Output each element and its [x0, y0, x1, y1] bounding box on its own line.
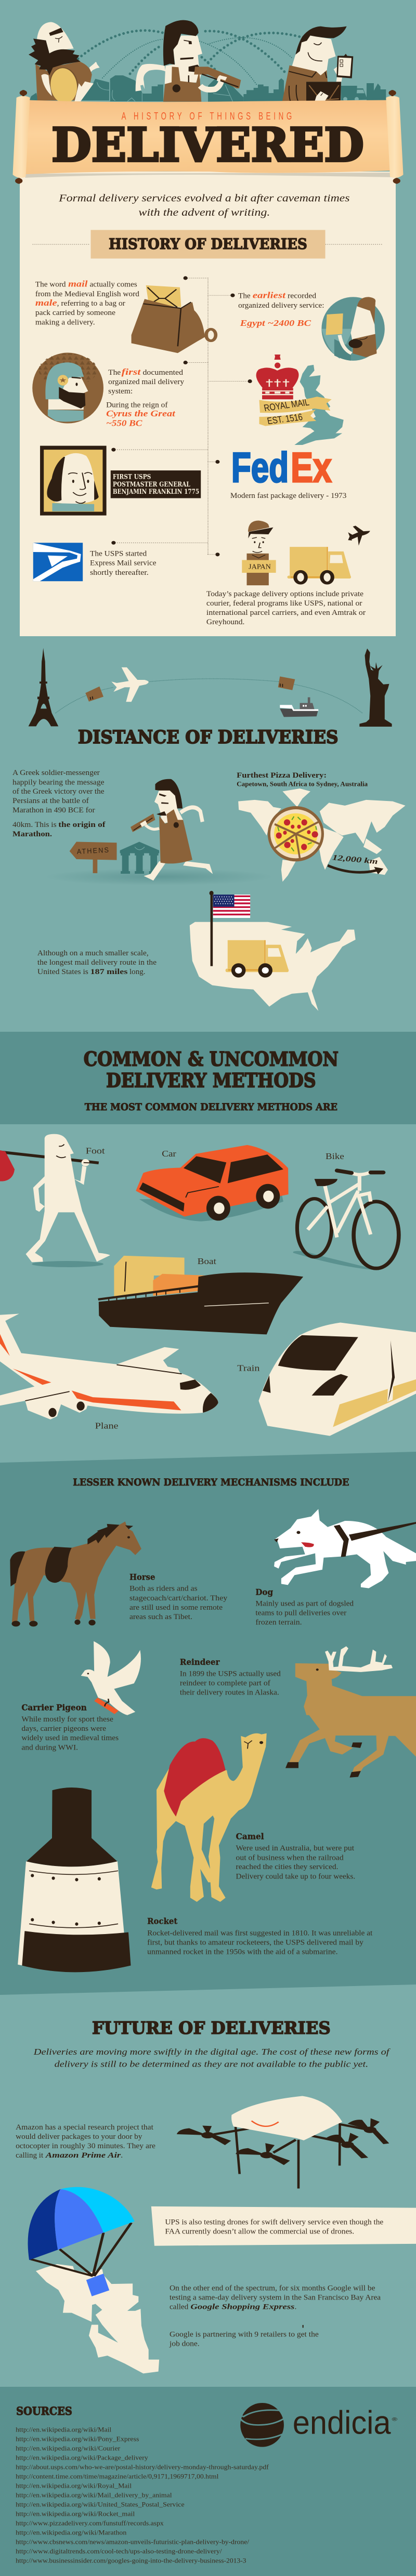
- text: marathon: A Greek soldier-messenger: [12, 769, 100, 777]
- text: dog: frozen terrain.: [255, 1619, 302, 1626]
- intro text: with the advent of writing.: [138, 207, 270, 218]
- list of source urls: http://en.wikipedia.org/wiki/Marathon: [16, 2529, 126, 2536]
- list of source urls: http://en.wikipedia.org/wiki/Mail: [16, 2426, 112, 2434]
- future of deliveries content: [16, 2096, 416, 2373]
- text: first mail system: [106, 367, 185, 428]
- list of source urls: http://en.wikipedia.org/wiki/United_States_Postal_Service: [16, 2501, 185, 2508]
- text: furthest pizza delivery: [237, 771, 368, 788]
- ground shadow: [45, 869, 274, 885]
- text: marathon: [12, 769, 106, 838]
- heading: common and uncommon delivery methods: [84, 1047, 339, 1092]
- panel: common delivery methods heading band: [0, 1032, 416, 1124]
- icon: greek temple: [120, 842, 159, 874]
- text: camel: out of business when the railroad: [236, 1853, 344, 1862]
- heading: history of deliveries: HISTORY OF DELIVERIES: [109, 235, 307, 253]
- panel: history of deliveries paper: [20, 172, 396, 636]
- text: word mail origin: actually comes: [89, 280, 137, 288]
- mechanism: reindeer: [285, 1646, 416, 1778]
- text: reindeer: In 1899 the USPS actually used: [180, 1670, 281, 1678]
- label plate: first postmaster general: BENJAMIN FRANKLIN 1775: [113, 488, 199, 496]
- panel: lesser known mechanisms band: [0, 1452, 416, 1995]
- text: furthest pizza delivery: Furthest Pizza Delivery:: [237, 771, 327, 780]
- text: reindeer: their delivery routes in Alaska.: [180, 1689, 279, 1697]
- text: amazon prime air: calling it: [16, 2151, 43, 2159]
- icon: athens sign: ATHENS: [76, 846, 109, 856]
- timeline connectors: [111, 276, 252, 556]
- logo: usps eagle: [33, 543, 83, 581]
- list of source urls: http://en.wikipedia.org/wiki/Royal_Mail: [16, 2482, 132, 2490]
- callout: ups drones: FAA currently doesn’t allow the commercial use of drones.: [165, 2227, 354, 2236]
- text: google shopping express: [169, 2284, 381, 2348]
- illustration: amazon octocopter: [177, 2096, 389, 2188]
- text: marathon: Marathon in 490 BCE for: [12, 806, 95, 814]
- text: longest mail route: long.: [129, 968, 146, 976]
- heading: common and uncommon delivery methods: COMMON & UNCOMMON: [84, 1047, 339, 1071]
- illustration: courier with japan parcel: [241, 521, 278, 585]
- method: car: [136, 1145, 289, 1221]
- history of deliveries section: [32, 192, 385, 626]
- text: reindeer: [180, 1658, 281, 1697]
- text: camel: [236, 1832, 355, 1881]
- method: car: Car: [162, 1149, 176, 1159]
- text: camel: reached the cities they serviced.: [236, 1862, 339, 1871]
- text: marathon: happily bearing the message: [12, 778, 105, 786]
- text: today's delivery options: courier, federal programs like USPS, national or: [206, 599, 362, 608]
- list of source urls: http://en.wikipedia.org/wiki/Mail_delivery_by_animal: [16, 2491, 172, 2499]
- text: today's delivery options: Today’s package delivery options include private: [206, 589, 363, 598]
- text: first mail system: During the reign of: [106, 401, 168, 409]
- heading: lesser known mechanisms: LESSER KNOWN DELIVERY MECHANISMS INCLUDE: [73, 1477, 349, 1488]
- text: word mail origin: from the Medieval English word: [35, 290, 139, 298]
- text: reindeer: reindeer to complete part of: [180, 1679, 271, 1687]
- messenger with scroll: [136, 20, 222, 102]
- list of source urls: http://www.businessinsider.com/googles-going-into-the-delivery-business-2013-3: [16, 2557, 246, 2565]
- text: word mail origin: The word: [35, 280, 66, 288]
- icon: statue of liberty: [359, 649, 392, 727]
- text: horse: Horse: [129, 1572, 155, 1582]
- text: carrier pigeon: Carrier Pigeon: [21, 1703, 87, 1713]
- text: google shopping express: Google is partnering with 9 retailers to get the: [170, 2330, 319, 2338]
- list of source urls: http://en.wikipedia.org/wiki/Pony_Express: [16, 2435, 139, 2443]
- heading: distance of deliveries: DISTANCE OF DELIVERIES: [78, 727, 339, 747]
- text: first mail system: documented: [142, 368, 184, 376]
- logo: fedex: Ex: [291, 443, 332, 491]
- text: carrier pigeon: days, carrier pigeons were: [21, 1725, 106, 1733]
- text: earliest delivery service: [238, 291, 324, 328]
- text: amazon prime air: Amazon has a special research project that: [16, 2123, 153, 2131]
- logo: fedex: Fed: [231, 443, 289, 491]
- text: carrier pigeon: [21, 1703, 119, 1752]
- scroll: [194, 67, 241, 88]
- heading: future of deliveries: FUTURE OF DELIVERIES: [92, 2018, 331, 2038]
- text: marathon: 40km. This is: [12, 821, 57, 829]
- method: plane: [0, 1313, 218, 1430]
- method: train: Train: [237, 1363, 260, 1373]
- text: google shopping express: job done.: [169, 2340, 200, 2348]
- rocket, camel and future section: [18, 1733, 391, 2069]
- illustration: royal mail crown and uk map: EST. 1516: [266, 412, 304, 426]
- intro: future: delivery is still to be determined as they are not available to the public yet.: [55, 2060, 368, 2069]
- text: earliest delivery service: The: [238, 291, 251, 300]
- logo: endicia: ®: [392, 2416, 397, 2422]
- text: carrier pigeon: While mostly for sport these: [21, 1715, 113, 1724]
- text: carrier pigeon: and during WWI.: [21, 1744, 78, 1752]
- text: furthest pizza delivery: Capetown, South Africa to Sydney, Australia: [237, 781, 368, 788]
- list of source urls: http://www.pizzadelivery.com/funstuff/records.aspx: [16, 2519, 164, 2527]
- illustration: royal mail crown and uk map: [256, 354, 344, 445]
- text: marathon: of the Greek victory over the: [12, 787, 105, 796]
- roller finials: [15, 90, 400, 183]
- text: amazon prime air: octocopter in roughly 30 minutes. They are: [16, 2141, 155, 2150]
- lesser known delivery mechanisms: [10, 1477, 416, 1778]
- kicker: a history of things being: A HISTORY OF THINGS BEING: [122, 110, 292, 122]
- illustration: parachute package: [28, 2187, 135, 2296]
- chart: world map with pizza: [238, 788, 406, 882]
- label plate: first postmaster general: POSTMASTER GENERAL: [113, 481, 190, 488]
- title banner scroll: [12, 90, 404, 183]
- text: usps express: The USPS started: [90, 549, 147, 558]
- text: today's delivery options: [206, 589, 366, 626]
- text: longest mail route: 187 miles: [90, 968, 128, 976]
- heading: common and uncommon delivery methods: DELIVERY METHODS: [106, 1069, 316, 1092]
- text: amazon prime air: would deliver packages to your door by: [16, 2132, 142, 2140]
- text: rocket: Rocket: [147, 1917, 178, 1926]
- method: foot: [0, 1134, 110, 1267]
- text: today's delivery options: Greyhound.: [206, 617, 244, 626]
- text: horse: areas such as Tibet.: [129, 1613, 192, 1621]
- text: camel: Were used in Australia, but were put: [236, 1844, 355, 1852]
- illustration: san francisco bay map: [36, 2264, 159, 2373]
- text: usps express: shortly thereafter.: [90, 568, 149, 576]
- list of source urls: http://en.wikipedia.org/wiki/Rocket_mail: [16, 2510, 135, 2518]
- list of source urls: http://about.usps.com/who-we-are/postal-history/delivery-monday-through-saturday.pdf: [16, 2463, 269, 2471]
- text: marathon: the origin of: [58, 821, 106, 829]
- list of source urls: http://www.cbsnews.com/news/amazon-unveils-futuristic-plan-delivery-by-drone/: [16, 2538, 249, 2546]
- text: first mail system: The: [108, 368, 121, 376]
- text: carrier pigeon: widely used in medieval times: [21, 1734, 119, 1742]
- text: horse: Both as riders and as: [129, 1585, 198, 1593]
- illustration: cyrus portrait: ★: [59, 376, 67, 385]
- icon: parcels on route: [85, 676, 295, 702]
- illustration: cyrus portrait: [32, 353, 103, 424]
- text: first mail system: system:: [108, 387, 133, 396]
- text: google shopping express: .: [294, 2303, 296, 2311]
- text: marathon: Persians at the battle of: [12, 797, 89, 805]
- method: foot: Foot: [86, 1146, 105, 1155]
- illustration: courier with japan parcel: JAPAN: [249, 563, 271, 571]
- text: word mail origin: , referring to a bag or: [57, 299, 125, 307]
- method: train: [237, 1322, 416, 1436]
- text: rocket: first, but thanks to amateur rocketeers, the USPS delivered mail by: [147, 1938, 364, 1947]
- list of source urls: [16, 2426, 269, 2565]
- text: first mail system: ~550 BC: [106, 419, 142, 428]
- distance of deliveries section: [12, 648, 406, 1092]
- caveman with egg and bone: [29, 22, 100, 105]
- text: word mail origin: making a delivery.: [35, 318, 95, 326]
- intro text: Formal delivery services evolved a bit after caveman times: [58, 192, 350, 204]
- text: camel: Delivery could take up to four weeks.: [236, 1872, 355, 1881]
- text: horse: stagecoach/cart/chariot. They: [129, 1594, 227, 1602]
- text: earliest delivery service: recorded: [288, 291, 317, 300]
- text: camel: Camel: [236, 1832, 264, 1842]
- text: longest mail route: the longest mail delivery route in the: [37, 958, 157, 967]
- subheading: most common methods: THE MOST COMMON DELIVERY METHODS ARE: [85, 1101, 337, 1113]
- text: first mail system: first: [122, 367, 141, 377]
- method: bike: [293, 1151, 399, 1270]
- text: rocket: Rocket-delivered mail was first suggested in 1810. It was unreliable at: [147, 1928, 373, 1937]
- icon: cargo plane: [111, 667, 149, 702]
- label plate: first postmaster general: FIRST USPS: [113, 473, 151, 481]
- text: earliest delivery service: Egypt ~2400 BC: [240, 319, 311, 328]
- illustration: delivery truck: [288, 547, 351, 583]
- icon: small airplane: [348, 525, 370, 546]
- mechanism: dog: [274, 1509, 416, 1588]
- text: longest mail route: Although on a much smaller scale,: [37, 949, 149, 957]
- intro text: [58, 192, 350, 218]
- text: longest mail route: [37, 949, 157, 976]
- intro: future: Deliveries are moving more swiftly in the digital age. The cost of these new forms of: [33, 2047, 391, 2057]
- text: reindeer: Reindeer: [180, 1658, 220, 1667]
- method: plane: Plane: [95, 1421, 119, 1430]
- heading: sources: SOURCES: [16, 2405, 72, 2417]
- icon: mail bag: [132, 285, 216, 353]
- text: dog: [255, 1587, 354, 1626]
- text: google shopping express: called: [170, 2303, 189, 2311]
- mechanism: carrier pigeon: [81, 1641, 141, 1715]
- text: word mail origin: mail: [68, 280, 88, 289]
- callout: ups drones: [151, 2206, 416, 2246]
- text: usps express: Express Mail service: [90, 559, 157, 567]
- right skyline: [208, 74, 386, 102]
- text: amazon prime air: [16, 2123, 155, 2159]
- truck on map: [226, 940, 289, 976]
- text: dog: teams to pull deliveries over: [255, 1609, 347, 1617]
- illustration: franklin portrait: [40, 446, 107, 516]
- mechanism: rocket: [18, 1788, 131, 1972]
- mechanism: horse: [10, 1521, 141, 1626]
- text: earliest delivery service: organized delivery service:: [238, 301, 324, 309]
- list of source urls: http://content.time.com/time/magazine/article/0,9171,1969717,00.html: [16, 2473, 219, 2480]
- text: longest mail route: United States is: [37, 968, 88, 976]
- sources footer content: [16, 2403, 397, 2565]
- text: dog: Mainly used as part of dogsled: [255, 1600, 354, 1608]
- illustration: royal mail crown and uk map: ROYAL MAIL: [263, 397, 310, 413]
- text: marathon: Marathon.: [12, 830, 52, 838]
- heading: history of deliveries: [90, 230, 326, 258]
- label plate: first postmaster general: [111, 470, 201, 498]
- header illustration: [29, 20, 386, 105]
- text: word mail origin: pack carried by someone: [35, 308, 115, 317]
- method: bike: Bike: [326, 1151, 344, 1161]
- text: amazon prime air: .: [121, 2151, 123, 2159]
- text: dog: Dog: [255, 1587, 273, 1597]
- list of source urls: http://en.wikipedia.org/wiki/Package_delivery: [16, 2454, 148, 2462]
- text: google shopping express: Google Shopping Express: [190, 2303, 295, 2311]
- shipping route arc: [56, 679, 362, 713]
- text: horse: [129, 1572, 227, 1621]
- icon: ship: [280, 697, 318, 717]
- illustration: greek runner: [131, 779, 213, 880]
- chart: world map with pizza: 12,000 km: [332, 853, 378, 866]
- list of source urls: http://www.digitaltrends.com/cool-tech/ups-also-testing-drone-delivery/: [16, 2547, 222, 2555]
- text: first mail system: organized mail delivery: [108, 377, 185, 386]
- method: boat: Boat: [198, 1256, 216, 1266]
- text: first mail system: Cyrus the Great: [106, 409, 175, 418]
- list of source urls: http://en.wikipedia.org/wiki/Courier: [16, 2444, 121, 2452]
- text: fedex caption: Modern fast package delivery - 1973: [230, 491, 346, 500]
- icon: eiffel tower: [29, 648, 58, 726]
- illustration: usa map with flag and truck: [190, 891, 356, 1011]
- text: rocket: [147, 1917, 373, 1956]
- intro: future: [33, 2047, 391, 2069]
- delivery route arcs: [78, 31, 304, 86]
- mechanism: camel: [151, 1733, 267, 1902]
- modern man with clipboard: [282, 27, 353, 102]
- panel: sources footer: [0, 2387, 416, 2576]
- text: amazon prime air: Amazon Prime Air: [45, 2151, 121, 2159]
- american flag: [210, 891, 250, 966]
- text: earliest delivery service: earliest: [253, 291, 286, 300]
- method: boat: [98, 1256, 303, 1334]
- icon: athens sign: [70, 842, 116, 873]
- text: horse: are still used in some remote: [129, 1604, 223, 1612]
- logo: endicia: [240, 2403, 397, 2447]
- text: word mail origin: [35, 280, 139, 326]
- text: usps express: [90, 549, 157, 576]
- common delivery methods illustrations: [0, 1101, 416, 1436]
- text: word mail origin: male: [35, 298, 57, 308]
- left skyline: [30, 75, 163, 101]
- text: rocket: unmanned rocket in the 1950s with the aid of a submarine.: [147, 1947, 337, 1956]
- text: today's delivery options: international parcel carriers, and even Amtrak or: [206, 608, 366, 617]
- illustration: egyptian medallion: [321, 297, 385, 361]
- scroll rollers: [12, 96, 404, 178]
